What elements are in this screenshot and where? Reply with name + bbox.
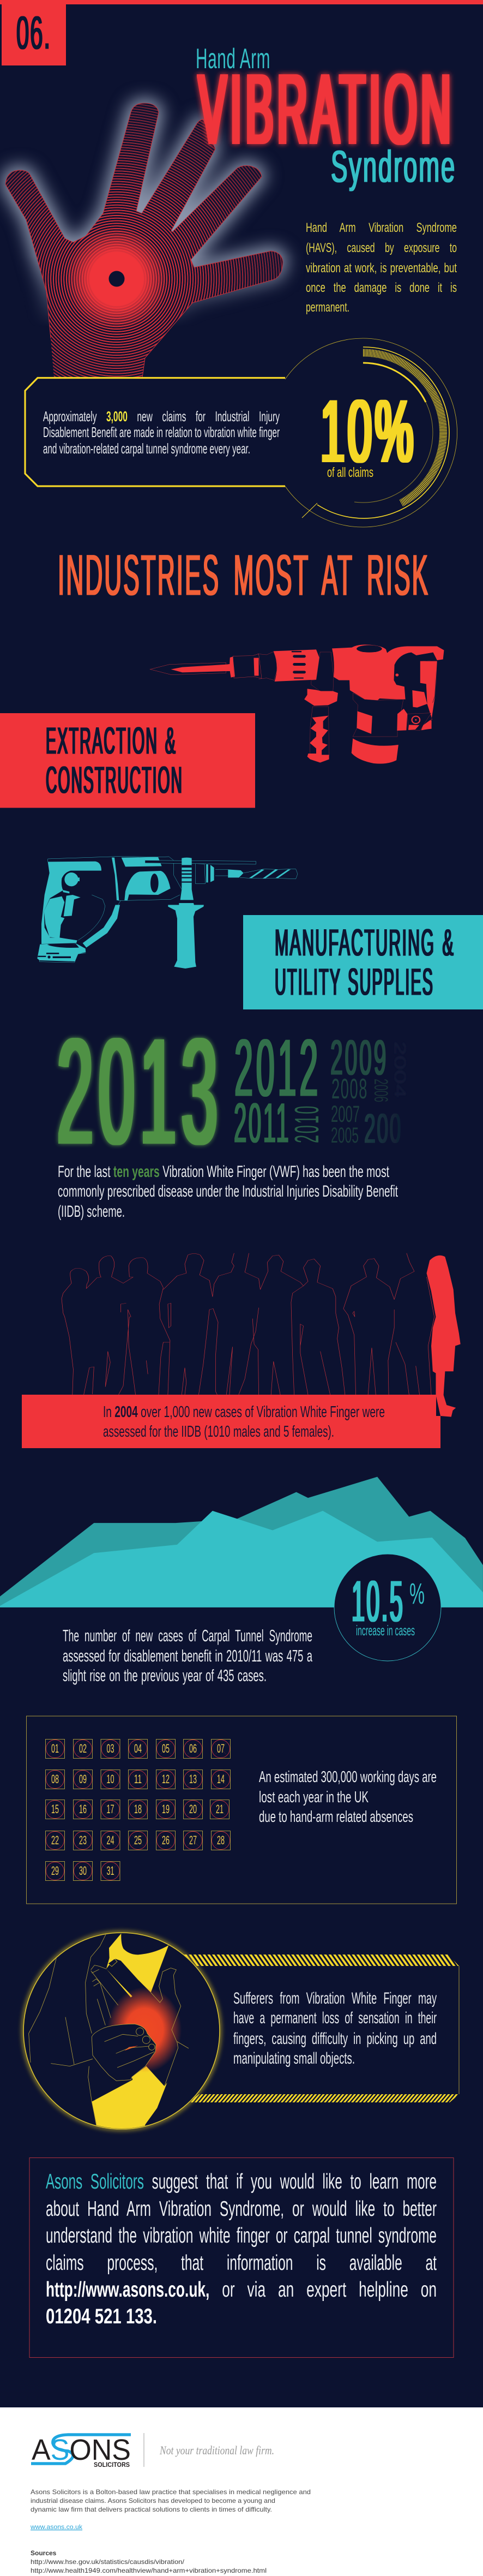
calendar grid: 19: [162, 1802, 170, 1816]
year stack chart: 2011: [234, 1092, 291, 1154]
panel: 2004 cases: [22, 1395, 440, 1448]
text: carpal tunnel: slight rise on the previous year of 435 cases.: [63, 1666, 267, 1685]
callout panel: claims: [25, 338, 457, 527]
callout text: [43, 408, 280, 457]
icon: red rotary hammer drill: [150, 644, 444, 764]
title: [196, 43, 456, 192]
title: Hand Arm: [196, 43, 270, 75]
callout text: Disablement Benefit are made in relation to vibration white finger: [43, 424, 280, 440]
tagline: Not your traditional law firm.: [159, 2443, 274, 2457]
calendar grid: 16: [79, 1802, 87, 1816]
hand illustration in circle: [23, 1933, 220, 2131]
calendar grid: 15: [51, 1802, 59, 1816]
text: carpal tunnel: [63, 1626, 312, 1685]
callout text: Approximately 3,000 new claims for Industrial Injury: [43, 408, 280, 425]
sources: [31, 2549, 267, 2574]
calendar grid: 25: [134, 1833, 142, 1847]
calendar grid: 11: [134, 1772, 142, 1786]
working days text: lost each year in the UK: [259, 1789, 369, 1806]
calendar grid: 26: [162, 1833, 170, 1847]
calendar grid: 05: [162, 1742, 170, 1755]
year stack chart: 2010: [288, 1104, 326, 1143]
text: ten years: [58, 1163, 398, 1221]
footer about text: Asons Solicitors is a Bolton-based law practice that specialises in medical negligence and: [31, 2488, 311, 2496]
calendar grid: 30: [79, 1864, 87, 1878]
logo divider: [143, 2433, 144, 2467]
calendar grid: 29: [51, 1864, 59, 1878]
website link: www.asons.co.uk: [30, 2523, 83, 2531]
panel: extraction and construction: [0, 713, 255, 808]
panel: lost working days: [26, 1716, 457, 1904]
year stack chart: 2012: [234, 1023, 321, 1113]
calendar grid: 22: [51, 1833, 59, 1847]
issue number badge: [2, 0, 66, 65]
panel: extraction and construction: CONSTRUCTION: [46, 759, 183, 801]
sufferers text: manipulating small objects.: [233, 2049, 355, 2067]
calendar grid: 31: [107, 1864, 114, 1878]
working days text: [259, 1768, 437, 1826]
calendar grid: 12: [162, 1772, 170, 1786]
panel: sufferers of vibration white finger: [23, 1933, 459, 2131]
year stack chart: 2009: [330, 1031, 388, 1085]
gauge rings: [285, 338, 457, 527]
panel: call to action: [29, 2157, 454, 2357]
highlighted female figure: [427, 1256, 461, 1417]
stat: 10% of all claims: of all claims: [327, 465, 373, 480]
hand illustration with vibration rings: [0, 98, 294, 382]
stat: 10.5% increase in cases: [334, 1554, 441, 1661]
calendar grid: 13: [189, 1772, 197, 1786]
footer about text: [31, 2488, 311, 2513]
footer about text: industrial disease claims. Asons Solicitors has developed to become a young and: [31, 2497, 275, 2505]
panel: 2004 cases: assessed for the IIDB (1010 males and 5 females).: [103, 1423, 334, 1441]
intro text: permanent.: [306, 300, 349, 315]
year stack chart: 2004: [391, 1041, 408, 1098]
sufferers text: [233, 1989, 437, 2067]
hatched bands and frame: [184, 1955, 459, 2102]
sources: http://www.health1949.com/healthview/hand+arm+vibration+syndrome.html: [31, 2567, 267, 2574]
calendar grid: 08: [51, 1772, 59, 1786]
calendar grid: 24: [107, 1833, 114, 1847]
sources: Sources: [31, 2549, 57, 2557]
calendar grid: 21: [216, 1802, 224, 1816]
calendar grid: [46, 1740, 230, 1880]
logo: Asons Solicitors: SOLICITORS: [94, 2461, 130, 2469]
panel: manufacturing and utility supplies: [243, 915, 483, 1009]
text: carpal tunnel: assessed for disablement benefit in 2010/11 was 475 a: [63, 1646, 312, 1665]
stat: 10.5% increase in cases: 10.5: [352, 1569, 404, 1634]
calendar grid: 18: [134, 1802, 142, 1816]
calendar grid: 04: [134, 1742, 142, 1755]
calendar grid: 03: [107, 1742, 114, 1755]
panel: call to action: 01204 521 133.: [46, 2305, 157, 2328]
calendar grid: 17: [107, 1802, 114, 1816]
people silhouettes: [62, 1253, 461, 1417]
panel: extraction and construction: EXTRACTION &: [46, 720, 177, 762]
calendar grid: 07: [217, 1742, 225, 1755]
year stack chart: 2005: [331, 1123, 359, 1147]
year stack chart: 2006: [370, 1079, 391, 1102]
icon: teal hammer drill: [37, 856, 298, 969]
text: ten years: (IIDB) scheme.: [58, 1203, 125, 1221]
year stack chart: 200: [364, 1105, 402, 1151]
calendar grid: 02: [79, 1742, 87, 1755]
stat: 10% of all claims: [321, 382, 416, 481]
calendar grid: 06: [189, 1742, 197, 1755]
year stack chart: 2007: [331, 1101, 360, 1127]
issue number badge: 06.: [16, 7, 51, 58]
calendar grid: 20: [189, 1802, 197, 1816]
year stack chart: 2013: [57, 1008, 223, 1175]
callout text: and vibration-related carpal tunnel syndrome every year.: [43, 440, 250, 457]
stat: 10.5% increase in cases: increase in cases: [356, 1622, 415, 1639]
logo: Asons Solicitors: ASONS: [32, 2434, 131, 2466]
year stack chart: 2008: [331, 1073, 368, 1105]
footer about text: dynamic law firm that delivers practical solutions to clients in times of difficulty.: [31, 2506, 272, 2513]
intro text: [306, 220, 457, 315]
calendar grid: 23: [79, 1833, 87, 1847]
sources: http://www.hse.gov.uk/statistics/causdis/vibration/: [31, 2558, 185, 2566]
calendar grid: 09: [79, 1772, 87, 1786]
calendar grid: 27: [189, 1833, 197, 1847]
top red bar: [0, 0, 483, 4]
calendar grid: 01: [51, 1742, 59, 1755]
calendar grid: 10: [107, 1772, 114, 1786]
mountain chart: [0, 1477, 483, 1607]
footer background: [0, 2407, 483, 2576]
calendar grid: 14: [217, 1772, 225, 1786]
calendar grid: 28: [217, 1833, 225, 1847]
stat: 10.5% increase in cases: %: [409, 1577, 425, 1610]
